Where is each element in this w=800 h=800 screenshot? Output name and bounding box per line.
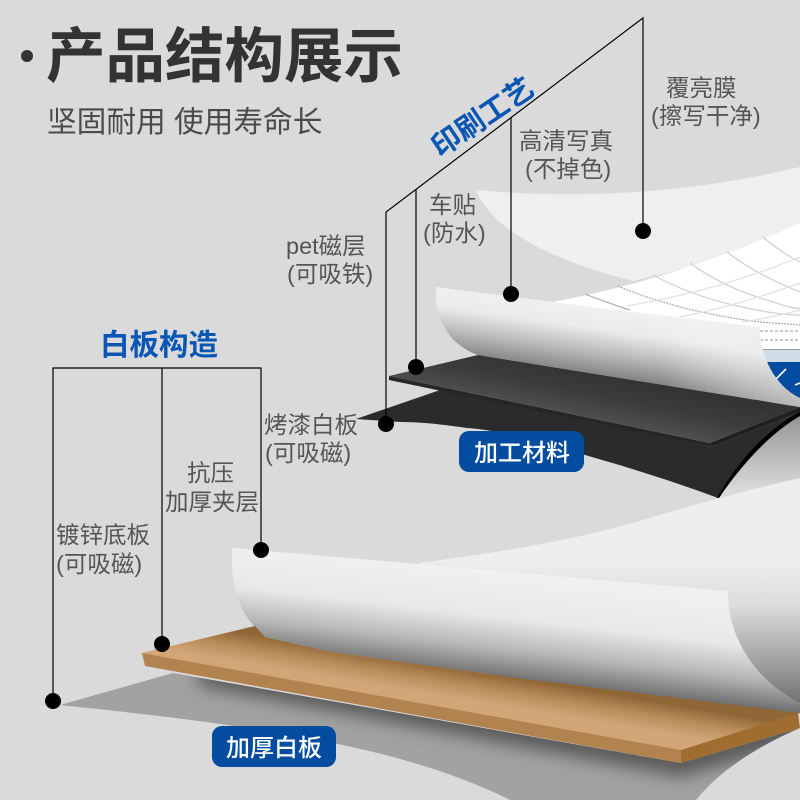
wood board xyxy=(142,626,800,763)
label: pet magnetic layer: pet磁层 xyxy=(286,233,366,259)
label: gloss film: 覆亮膜 xyxy=(666,75,736,101)
label: HD print: (不掉色) xyxy=(525,156,611,182)
tag: processing materials: 加工材料 xyxy=(474,440,570,467)
label: galvanized base: 镀锌底板 xyxy=(56,522,150,548)
label: galvanized base: (可吸磁) xyxy=(56,551,142,577)
subtitle: 坚固耐用 使用寿命长 xyxy=(47,106,322,139)
curled white sheet xyxy=(232,548,800,713)
callout lines: board structure xyxy=(53,368,261,701)
label: pressure layer: 加厚夹层 xyxy=(165,489,259,515)
label: baked white board: 烤漆白板 xyxy=(264,412,358,438)
label: gloss film: (擦写干净) xyxy=(651,103,761,129)
dark magnetic plate xyxy=(389,355,800,447)
tag: processing materials xyxy=(459,431,584,472)
label: pet magnetic layer: (可吸铁) xyxy=(287,261,373,287)
curled white sticker xyxy=(436,287,800,407)
board shadow xyxy=(60,672,800,800)
tag: thick whiteboard: 加厚白板 xyxy=(226,735,322,762)
label: HD print: 高清写真 xyxy=(519,128,613,154)
label: car sticker: (防水) xyxy=(423,220,486,246)
black foam layer xyxy=(356,389,800,498)
dot markers xyxy=(45,223,651,709)
label: pressure layer: 抗压 xyxy=(187,460,234,486)
shadow beside foam xyxy=(716,410,800,498)
heading: printing process: 印刷工艺 xyxy=(425,72,540,164)
label: car sticker: 车贴 xyxy=(429,192,476,218)
printed map sheet xyxy=(553,223,800,410)
tag: thick whiteboard xyxy=(212,726,336,767)
title: 产品结构展示 xyxy=(46,23,403,90)
back sheet xyxy=(418,478,800,713)
panel: whiteboard layers xyxy=(60,478,800,800)
label: baked white board: (可吸磁) xyxy=(265,440,351,466)
callout lines: printing process xyxy=(386,18,643,424)
panel: printing layers xyxy=(356,167,800,498)
heading: board structure: 白板构造 xyxy=(100,329,218,362)
gloss film sheet xyxy=(476,167,800,281)
